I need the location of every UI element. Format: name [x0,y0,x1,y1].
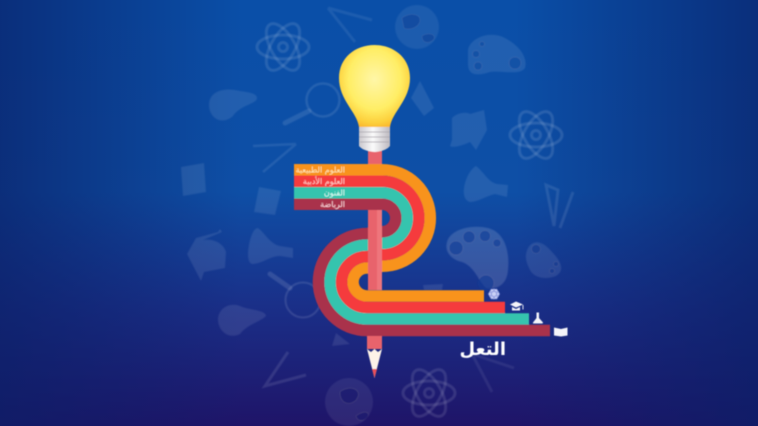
icon: compass top [328,8,372,42]
icon: globe lower [325,378,373,426]
icon: globe top [395,5,439,49]
ribbon: orange [294,170,484,296]
icon: atom right [510,106,562,164]
icon: compass left [253,144,296,172]
icon: flask right [464,166,508,202]
icon: wedge behind pencil [332,333,350,346]
label: natural sciences: العلوم الطبيعية [296,166,345,174]
end-of-ribbon icons [488,288,568,336]
icon: ruler triangle [546,185,573,228]
light bulb [339,45,410,152]
icon: graduation cap left [187,229,226,281]
icon: palette top right [468,35,526,74]
icon: book near bulb [411,81,434,116]
label: humanities: العلوم الأدبية [303,176,345,186]
bulb screw base [359,127,390,152]
icon: large palette [446,227,508,291]
icon: small palette [526,242,561,278]
icon: small atom [488,288,500,300]
icon: flask left upper [209,90,257,120]
main illustration [294,45,568,378]
ribbon: red [294,181,505,308]
pencil middle shaft [368,210,382,290]
icon: magnifier upper [285,84,340,123]
pencil lower shaft and tip [367,336,382,378]
icon: scrap near bars [423,284,443,290]
icon: compass lower right [472,354,514,392]
icon: magnifier lower [270,274,320,318]
icon: book center [254,187,281,215]
pencil upper shaft [368,148,382,168]
label: arts: الفنون [324,188,345,198]
icon: small flask [533,312,543,324]
icon: bulb left lower [218,305,266,336]
icon: flask left lower [248,228,293,264]
icon: compass lower [265,352,306,386]
icon: graduation cap right [450,110,487,150]
background icon pattern [181,5,573,426]
coloured ribbons forming S-curve [294,170,550,330]
ribbon: teal [294,193,529,319]
label: mathematics: الرياضة [320,200,345,209]
title: التعل [459,339,506,360]
icon: small graduation cap [510,302,523,310]
bulb glass [339,45,410,127]
icon: book left [181,163,206,196]
icon: atom bottom [403,364,455,422]
category labels [296,166,345,209]
icon: small book [554,328,568,336]
ribbon: maroon [294,204,550,330]
icon: atom top left [257,18,309,76]
